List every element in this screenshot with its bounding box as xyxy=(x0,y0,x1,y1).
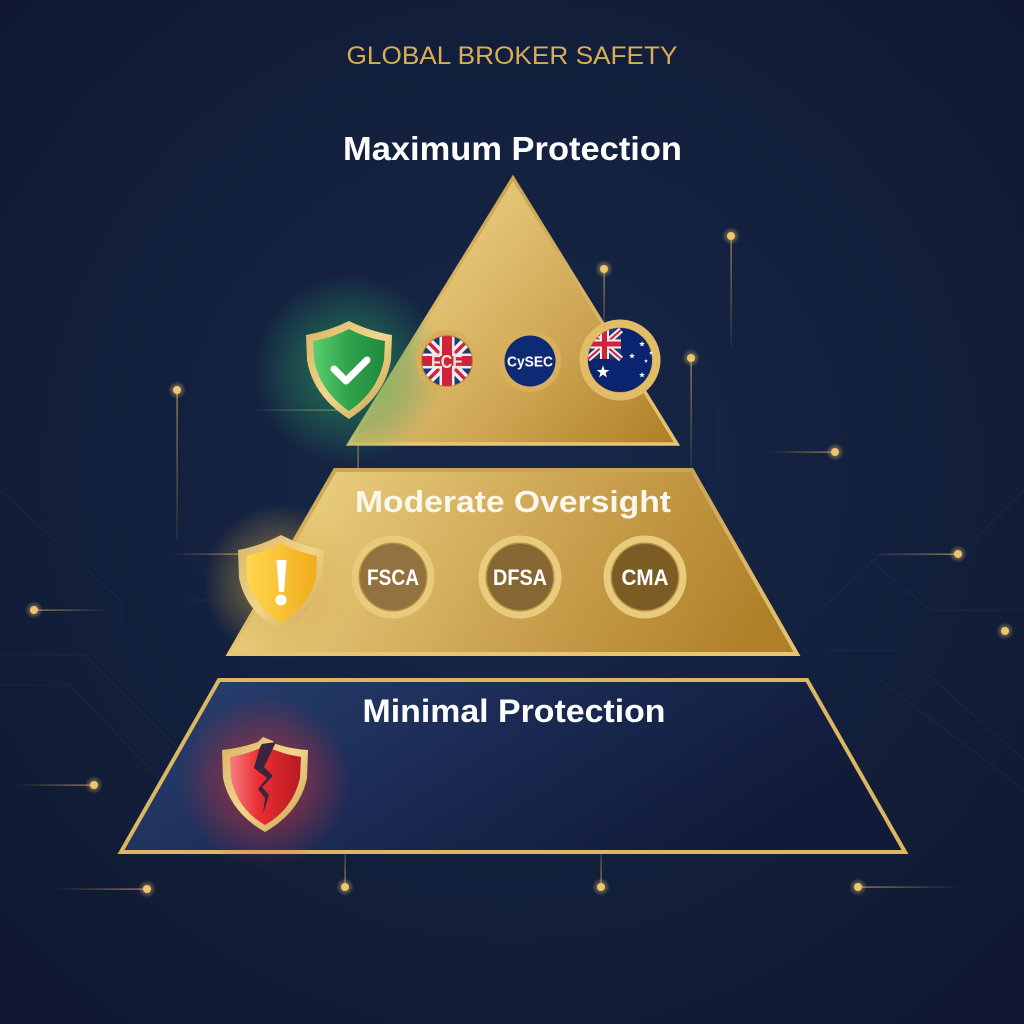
icon: yellow shield with exclamation xyxy=(203,504,359,660)
connector lines and nodes xyxy=(15,227,1014,898)
badge: FSCA: FSCA xyxy=(367,565,419,590)
heading: moderate oversight: Moderate Oversight xyxy=(355,484,671,519)
heading: maximum protection: Maximum Protection xyxy=(343,130,682,167)
green glow xyxy=(254,275,444,465)
badge: Australian flag xyxy=(580,320,660,400)
badge: FCA with UK flag xyxy=(416,330,473,390)
badge: FCA with UK flag: FCE xyxy=(431,352,463,372)
heading: minimal protection: Minimal Protection xyxy=(362,693,666,729)
icon: broken red shield xyxy=(179,696,351,868)
badge: CySEC: CySEC xyxy=(507,354,553,370)
icon: green shield with check xyxy=(306,321,392,419)
circuit background pattern xyxy=(0,375,1024,790)
title: GLOBAL BROKER SAFETY xyxy=(346,42,678,70)
panel: middle tier xyxy=(229,470,797,654)
badge: DFSA: DFSA xyxy=(493,565,547,590)
panel: bottom tier xyxy=(121,680,905,852)
panel: top tier xyxy=(254,178,677,465)
badge: FSCA xyxy=(352,536,434,618)
badge: DFSA xyxy=(478,536,562,618)
badge: CySEC xyxy=(499,330,561,392)
badge: CMA xyxy=(604,536,686,618)
badge: CMA: CMA xyxy=(622,565,669,590)
